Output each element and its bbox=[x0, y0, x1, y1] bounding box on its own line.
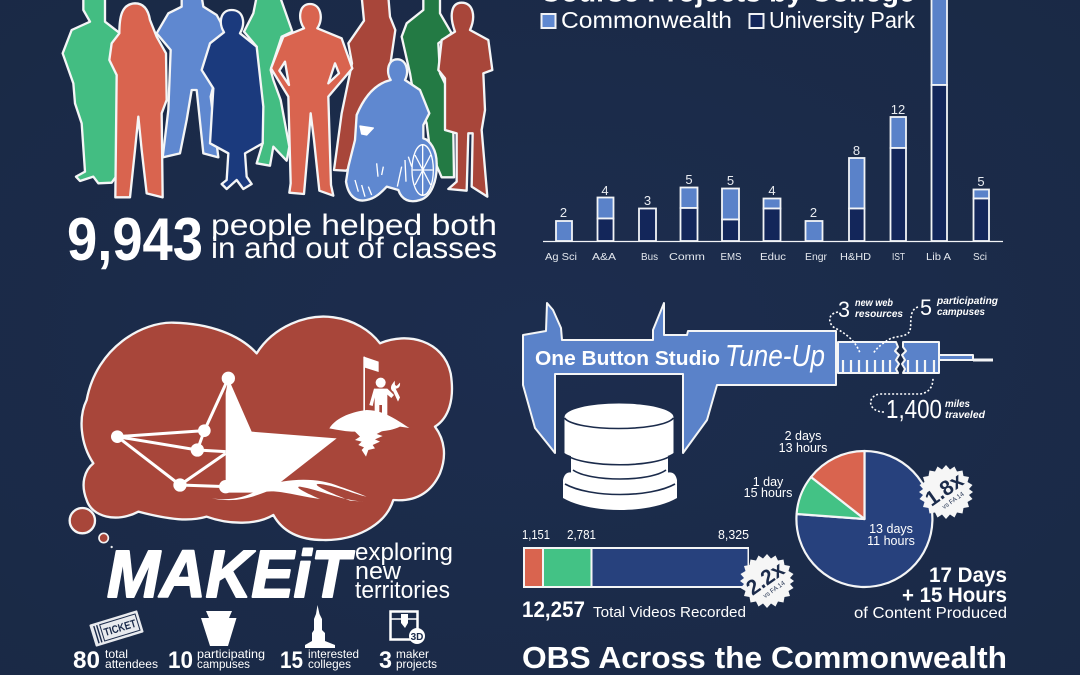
legend: University Park bbox=[769, 7, 915, 33]
thought bubbles bbox=[70, 508, 113, 548]
person: dark green back bbox=[402, 0, 454, 177]
bar: Engr bbox=[806, 221, 822, 241]
badge: 1.8x bbox=[919, 465, 973, 519]
slice: red bbox=[811, 451, 864, 519]
college axis labels: EMS bbox=[720, 251, 742, 263]
bar: Comm bbox=[680, 188, 698, 241]
person: green back bbox=[244, 0, 292, 166]
person: navy woman bbox=[202, 10, 263, 189]
bar: H&HD bbox=[849, 158, 864, 241]
college axis labels: Lib A bbox=[926, 251, 951, 263]
badge: 2.2x bbox=[740, 554, 794, 608]
callout: web resources: new web bbox=[855, 297, 894, 309]
badge: 2.2x: vs FA 14 bbox=[762, 580, 787, 600]
bar: Educ bbox=[764, 198, 780, 241]
bar: EMS bbox=[722, 188, 739, 241]
content produced totals: of Content Produced bbox=[854, 605, 1007, 622]
college axis labels: Sci bbox=[973, 251, 987, 263]
legend: Commonwealth bbox=[561, 7, 732, 33]
person: salmon man bbox=[271, 4, 352, 196]
star constellation bbox=[111, 372, 337, 493]
icon: lens stack bbox=[563, 404, 677, 510]
icon: ticket bbox=[89, 610, 144, 647]
callout: web resources: 3 bbox=[838, 297, 850, 322]
video bar labels: 8,325 bbox=[718, 528, 749, 542]
pie labels: 2 days bbox=[785, 429, 821, 443]
college axis labels: Educ bbox=[760, 251, 786, 263]
caliper ticks bbox=[843, 360, 934, 373]
bar value labels: 5 bbox=[685, 172, 693, 187]
bar value labels: 3 bbox=[644, 193, 651, 208]
pie labels bbox=[744, 429, 915, 548]
people silhouettes group bbox=[63, 0, 492, 201]
stat: campuses: 10 bbox=[168, 647, 193, 674]
callout: web resources: resources bbox=[855, 308, 903, 320]
icon: 3D printer: 3D bbox=[411, 632, 423, 643]
caliper slider left bbox=[838, 342, 899, 373]
tagline bbox=[355, 539, 453, 604]
section heading: OBS: OBS Across the Commonwealth bbox=[522, 640, 1007, 675]
stat: maker projects: 3 bbox=[379, 647, 392, 674]
stat: attendees: 80 bbox=[73, 647, 100, 674]
callout: web resources bbox=[830, 297, 903, 353]
stat: campuses bbox=[168, 647, 265, 674]
stat: colleges: interested bbox=[308, 647, 359, 661]
bar: IST bbox=[890, 117, 906, 241]
caliper label: One Button Studio bbox=[535, 348, 720, 370]
college axis labels: H&HD bbox=[840, 251, 871, 263]
callout: miles traveled bbox=[871, 378, 986, 424]
pie labels: 15 hours bbox=[744, 486, 792, 500]
callout: participating campuses: campuses bbox=[937, 306, 985, 318]
callout: miles traveled: traveled bbox=[945, 409, 986, 421]
bar: Ag Sci bbox=[556, 221, 572, 241]
waves bbox=[212, 480, 367, 502]
bar value labels: 2 bbox=[560, 205, 567, 220]
stat: maker projects bbox=[379, 647, 437, 674]
college axis labels: Engr bbox=[805, 251, 827, 263]
content produced totals: + 15 Hours bbox=[902, 584, 1007, 607]
stacked bar chart by college bbox=[543, 0, 1003, 242]
callout: miles traveled: miles bbox=[945, 398, 970, 410]
bar value labels: 8 bbox=[853, 143, 860, 158]
MAKEiT title: MAKEiT bbox=[107, 537, 355, 612]
pie chart bbox=[796, 451, 932, 587]
stat: maker projects: maker bbox=[396, 647, 429, 661]
videos total bbox=[522, 597, 746, 622]
videos total: 12,257 bbox=[522, 597, 585, 622]
college axis labels: IST bbox=[892, 251, 905, 263]
bar value labels: 5 bbox=[727, 173, 734, 188]
callout: participating campuses bbox=[873, 295, 999, 354]
stat: colleges: 15 bbox=[280, 647, 303, 674]
person: wheelchair user bbox=[346, 59, 437, 201]
icon: university tower bbox=[305, 605, 335, 648]
pie labels: 13 days bbox=[869, 522, 913, 536]
stat: colleges: colleges bbox=[308, 657, 351, 671]
icon: ticket: TICKET bbox=[103, 618, 138, 639]
tagline: territories bbox=[355, 577, 450, 604]
stat: colleges bbox=[280, 647, 359, 674]
caliper body bbox=[523, 303, 836, 453]
person: dark red back bbox=[334, 0, 407, 171]
pie labels: 11 hours bbox=[867, 534, 915, 548]
video bar labels: 1,151 bbox=[522, 528, 550, 542]
bar: Bus bbox=[639, 208, 656, 241]
content produced totals: 17 Days bbox=[929, 564, 1007, 587]
pie labels: 1 day bbox=[753, 475, 784, 489]
stat: attendees: attendees bbox=[105, 657, 158, 671]
callout: participating campuses: 5 bbox=[920, 295, 932, 320]
bar: Sci bbox=[974, 190, 989, 241]
stat: attendees: total bbox=[105, 647, 128, 661]
videos total: Total Videos Recorded bbox=[593, 604, 746, 621]
icon: 3D printer bbox=[390, 612, 425, 644]
badge: 2.2x: 2.2x bbox=[742, 558, 789, 600]
stat: maker projects: projects bbox=[396, 657, 437, 671]
bar value labels: 2 bbox=[810, 205, 817, 220]
person: green left bbox=[63, 0, 120, 183]
tagline: exploring bbox=[355, 539, 453, 566]
person: blue back bbox=[157, 0, 227, 157]
stat: campuses: participating bbox=[197, 647, 265, 661]
caliper label bbox=[535, 338, 825, 373]
caliper slider right bbox=[902, 342, 939, 373]
badge: 1.8x: 1.8x bbox=[921, 469, 968, 511]
thought cloud with star and explorer bbox=[70, 317, 452, 548]
callout: participating campuses: participating bbox=[936, 295, 999, 307]
legend bbox=[542, 7, 915, 33]
bar value labels: 5 bbox=[977, 174, 985, 189]
headline: people helped: people helped both bbox=[211, 209, 497, 242]
headline: people helped: 9,943 bbox=[67, 206, 203, 273]
caliper label: Tune-Up bbox=[725, 338, 825, 373]
person: brown bbox=[438, 3, 492, 197]
callout: miles traveled: 1,400 bbox=[886, 394, 942, 424]
icon: keystone bbox=[201, 611, 236, 646]
college axis labels: Bus bbox=[641, 251, 658, 263]
caliper rod bbox=[939, 355, 973, 360]
video bar labels bbox=[522, 528, 749, 542]
video bar labels: 2,781 bbox=[567, 528, 596, 542]
slice: green bbox=[797, 477, 864, 519]
headline: people helped: in and out of classes bbox=[211, 232, 497, 265]
caliper illustration bbox=[523, 303, 993, 453]
stat: attendees bbox=[73, 647, 158, 674]
pie labels: 13 hours bbox=[779, 441, 827, 455]
badge: 1.8x: vs FA 14 bbox=[941, 491, 966, 511]
person: salmon woman bbox=[109, 3, 167, 197]
slice: blue bbox=[796, 451, 932, 587]
bar: A&A bbox=[598, 198, 614, 241]
college axis labels: Ag Sci bbox=[545, 251, 577, 263]
explorer on island bbox=[329, 357, 409, 457]
cloud bbox=[82, 317, 452, 540]
college axis labels bbox=[545, 251, 987, 263]
college axis labels: Comm bbox=[669, 251, 705, 263]
tagline: new bbox=[355, 558, 402, 585]
bar value labels: 4 bbox=[768, 183, 776, 198]
bar value labels: 4 bbox=[601, 183, 609, 198]
bar value labels bbox=[560, 102, 985, 220]
stat: campuses: campuses bbox=[197, 657, 250, 671]
bar value labels: 12 bbox=[891, 102, 905, 117]
content produced totals bbox=[854, 564, 1007, 622]
college axis labels: A&A bbox=[592, 251, 616, 263]
headline: people helped bbox=[67, 206, 497, 273]
bar: Lib A bbox=[932, 0, 947, 241]
stacked video bar bbox=[523, 547, 749, 588]
